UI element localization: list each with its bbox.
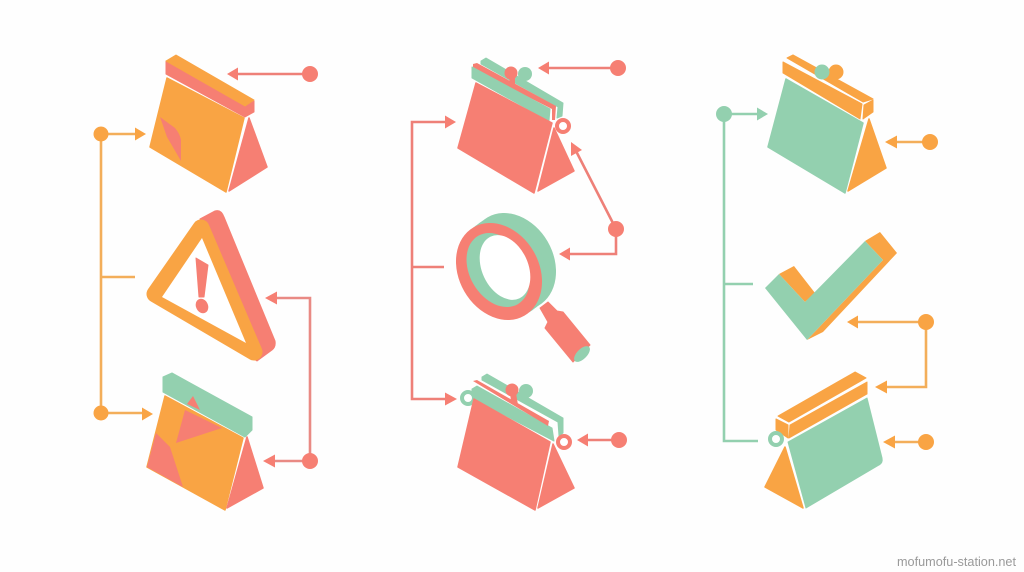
connector: left column bracket — [94, 126, 153, 420]
icon: magnifying glass — [439, 197, 593, 365]
icon: coral purse bottom — [458, 374, 574, 510]
connector: centre column bracket — [412, 116, 457, 406]
icon: check mark — [765, 232, 897, 340]
icon: green purse top — [768, 55, 886, 193]
arrow: to orange purse clasp — [227, 66, 318, 82]
connector: magnifier callouts — [559, 142, 624, 260]
connector: pink bracket on right of left column — [263, 292, 318, 469]
icon: coral purse top — [458, 58, 574, 193]
connector: right column bracket — [716, 106, 768, 441]
icon: green purse bottom — [765, 372, 882, 508]
icon: orange purse top — [150, 55, 267, 192]
connector: orange bracket on right column — [847, 314, 934, 394]
arrow: to green purse side — [885, 134, 938, 150]
icon: orange purse bottom with pink patches — [147, 373, 263, 510]
arrow: to green purse bottom — [883, 434, 934, 450]
arrow: to centre top purse clasp — [538, 60, 626, 76]
watermark: mofumofu-station.net — [897, 555, 1017, 569]
icon: warning triangle — [155, 211, 275, 361]
arrow: to centre bottom purse ring — [577, 432, 627, 448]
